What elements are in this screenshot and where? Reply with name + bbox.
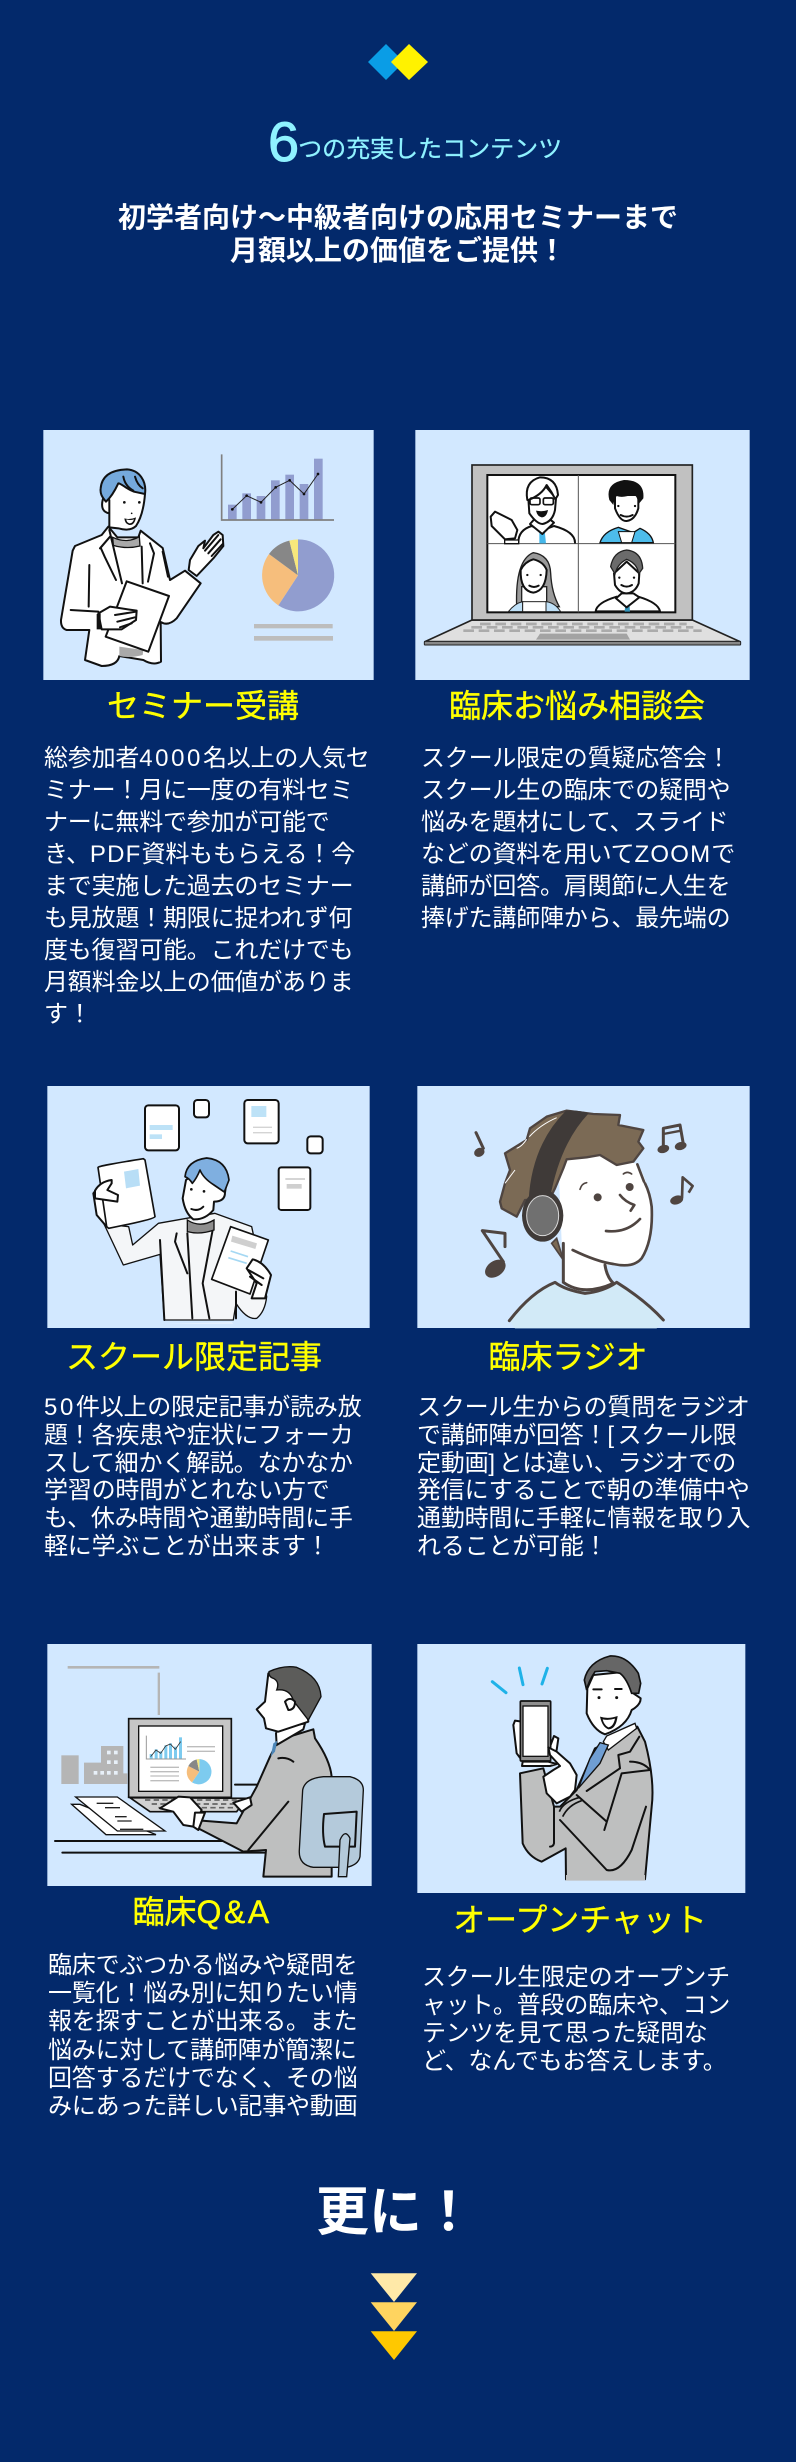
text: seminar: も見放題！期限に捉われず何: [44, 905, 352, 932]
office background: [61, 1666, 160, 1784]
text: seminar: き、PDF資料ももらえる！今: [44, 841, 355, 868]
text: Q&A: 悩みに対して講師陣が簡潔に: [48, 2037, 357, 2064]
laptop with charts: [129, 1719, 247, 1812]
panel: open chat illustration: [417, 1644, 746, 1893]
heading: consultation: 臨床お悩み相談会: [449, 688, 705, 724]
text: articles: も、休み時間や通勤時間に手: [44, 1505, 353, 1532]
text: articles: 軽に学ぶことが出来ます！: [44, 1533, 330, 1560]
text: Q&A: 回答するだけでなく、その悩: [48, 2065, 357, 2092]
text: consultation: 悩みを題材にして、スライド: [421, 809, 728, 836]
text: articles: 題！各疾患や症状にフォーカ: [44, 1422, 353, 1449]
heading: value statement: 月額以上の価値をご提供！: [230, 235, 566, 266]
text: Q&A: みにあった詳しい記事や動画: [48, 2093, 357, 2120]
person presenting: [61, 469, 223, 666]
text: radio: [417, 1394, 750, 1560]
heading: open chat: オープンチャット: [453, 1902, 707, 1938]
text: seminar: す！: [44, 1001, 92, 1028]
heading: value statement: [118, 202, 678, 266]
bar chart: [222, 454, 334, 520]
text: radio: 定動画]とは違い、ラジオでの: [417, 1450, 736, 1477]
heading: more: 更に！: [316, 2183, 475, 2242]
text: Q&A: 一覧化！悩み別に知りたい情: [48, 1980, 357, 2007]
heading: radio: 臨床ラジオ: [488, 1339, 648, 1375]
desk and papers: [55, 1785, 265, 1853]
text: radio: 通勤時間に手軽に情報を取り入: [417, 1505, 750, 1532]
man in suit typing: [160, 1667, 363, 1877]
text: consultation: 捧げた講師陣から、最先端の: [421, 905, 730, 932]
heading: Q&A: 臨床Q&A: [132, 1894, 272, 1930]
laptop: [424, 465, 741, 645]
man in suit holding phone: [513, 1656, 652, 1881]
text: articles: 学習の時間がとれない方で: [44, 1477, 330, 1504]
text: consultation: 講師が回答。肩関節に人生を: [421, 873, 730, 900]
panel: articles illustration: [47, 1086, 370, 1328]
legend lines: [254, 624, 333, 641]
music notes: [473, 1125, 693, 1281]
arrow: three stacked triangles: [370, 2273, 417, 2360]
text: open chat: スクール生限定のオープンチ: [422, 1964, 730, 1991]
text: articles: [44, 1394, 362, 1560]
text: Q&A: [48, 1952, 357, 2120]
panel: seminar illustration: [43, 430, 374, 680]
text: articles: スして細かく解説。なかなか: [44, 1450, 353, 1477]
panel: Q&A illustration: [47, 1644, 372, 1886]
signal strokes: [492, 1668, 547, 1693]
text: seminar: 総参加者4000名以上の人気セ: [44, 745, 370, 772]
person with headphones: [500, 1111, 663, 1328]
text: Q&A: 臨床でぶつかる悩みや疑問を: [48, 1952, 357, 1979]
participant 3: woman with long hair: [508, 553, 561, 612]
text: seminar: まで実施した過去のセミナー: [44, 873, 353, 900]
heading: articles: スクール限定記事: [66, 1339, 322, 1375]
participant 2: man with blue jacket: [600, 480, 653, 543]
pie chart: [262, 539, 334, 611]
heading: seminar: セミナー受講: [107, 688, 299, 724]
text: seminar: ミナー！月に一度の有料セミ: [44, 777, 353, 804]
text: seminar: ナーに無料で参加が可能で: [44, 809, 330, 836]
text: articles: 50件以上の限定記事が読み放: [44, 1394, 362, 1421]
text: open chat: テンツを見て思った疑問な: [422, 2020, 708, 2047]
text: open chat: ャット。普段の臨床や、コン: [422, 1992, 730, 2019]
text: radio: 発信にすることで朝の準備中や: [417, 1477, 750, 1504]
subtitle: 6 contents: 6つの充実したコンテンツ: [268, 110, 562, 173]
floating documents: [145, 1100, 323, 1210]
text: seminar: [44, 745, 370, 1028]
text: consultation: スクール限定の質疑応答会！: [421, 745, 730, 772]
text: seminar: 月額料金以上の価値がありま: [44, 969, 353, 996]
text: open chat: [422, 1964, 730, 2075]
panel: radio illustration: [417, 1086, 750, 1328]
heading: value statement: 初学者向け〜中級者向けの応用セミナーまで: [118, 202, 678, 233]
participant 4: man with tie: [596, 550, 660, 612]
text: radio: で講師陣が回答！[スクール限: [417, 1422, 737, 1449]
text: radio: れることが可能！: [417, 1533, 607, 1560]
text: radio: スクール生からの質問をラジオ: [417, 1394, 750, 1421]
panel: video consultation illustration: [415, 430, 750, 680]
text: consultation: スクール生の臨床での疑問や: [421, 777, 730, 804]
text: seminar: 度も復習可能。これだけでも: [44, 937, 353, 964]
text: consultation: [421, 745, 735, 932]
person reading documents: [93, 1158, 271, 1323]
participant 1: man with glasses: [491, 477, 575, 544]
text: open chat: ど、なんでもお答えします。: [422, 2048, 727, 2075]
text: Q&A: 報を探すことが出来る。また: [48, 2008, 357, 2035]
icon: two diamonds: [368, 44, 428, 80]
text: consultation: などの資料を用いてZOOMで: [421, 841, 735, 868]
